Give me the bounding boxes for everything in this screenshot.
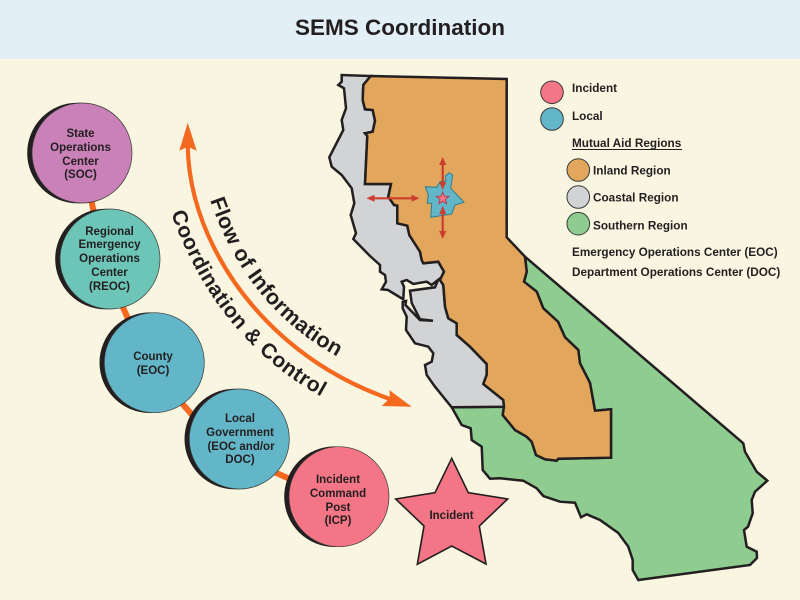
circle: Regional Emergency Operations Center: Center [91, 267, 128, 279]
legend item: southern region [567, 212, 688, 235]
circle: Local Government [184, 389, 289, 489]
legend item: inland region [567, 159, 671, 181]
circle: County EOC [100, 312, 204, 413]
circle: Incident Command Post: (ICP) [325, 515, 352, 527]
circle: Regional Emergency Operations Center: Emergency [78, 239, 141, 251]
region: southern [452, 257, 767, 580]
circle: State Operations Center: Center [62, 156, 99, 168]
header band [0, 0, 800, 59]
map: California mutual aid regions [329, 75, 767, 580]
circle: Regional Emergency Operations Center: (REOC) [89, 281, 130, 293]
circle: Incident Command Post: Post [326, 502, 351, 514]
circle: Local Government: (EOC and/or [207, 441, 275, 453]
title: SEMS Coordination [295, 15, 505, 40]
connectors between levels [91, 198, 292, 480]
circle: State Operations Center [27, 103, 132, 203]
label: Flow of Information: Flow of Information [210, 196, 340, 356]
incident star: Incident [429, 510, 474, 522]
label: Coordination & Control: Coordination & Control [173, 210, 328, 396]
circle: State Operations Center: Operations [50, 142, 111, 154]
legend item: southern region: Southern Region [593, 220, 688, 232]
legend note: EOC: Emergency Operations Center (EOC) [572, 246, 778, 259]
circle: Local Government: DOC) [225, 454, 255, 466]
circle: Incident Command Post: Incident [316, 474, 360, 486]
circle: Regional Emergency Operations Center: Operations [79, 253, 140, 265]
map arrows: spread from incident [366, 157, 446, 239]
circle: Regional Emergency Operations Center: Regional [85, 226, 134, 238]
legend note: DOC: Department Operations Center (DOC) [572, 266, 780, 279]
circle: Incident Command Post: Command [310, 488, 366, 500]
incident star on map [436, 192, 449, 204]
legend item: inland region: Inland Region [593, 164, 671, 178]
legend [541, 81, 780, 279]
circle: Regional Emergency Operations Center [55, 209, 160, 309]
legend item: incident [541, 81, 617, 104]
circle: State Operations Center: (SOC) [64, 169, 97, 181]
legend item: incident: Incident [572, 82, 617, 95]
circle: County EOC: (EOC) [137, 365, 169, 377]
legend item: local [541, 108, 603, 130]
circle: Incident Command Post [284, 446, 389, 547]
legend item: coastal region: Coastal Region [593, 192, 679, 204]
legend item: local: Local [572, 110, 603, 123]
circle: Local Government: Local [225, 413, 255, 425]
arrow: two-way flow [179, 123, 412, 407]
legend item: coastal region [567, 186, 679, 208]
incident star [396, 458, 508, 564]
circle: State Operations Center: State [66, 128, 95, 140]
circle: Local Government: Government [206, 427, 274, 439]
region: coastal [329, 75, 504, 407]
region: inland [363, 76, 611, 461]
legend heading: mutual aid regions: Mutual Aid Regions [572, 137, 682, 150]
circle: County EOC: County [133, 351, 173, 363]
local area on map [425, 173, 464, 217]
